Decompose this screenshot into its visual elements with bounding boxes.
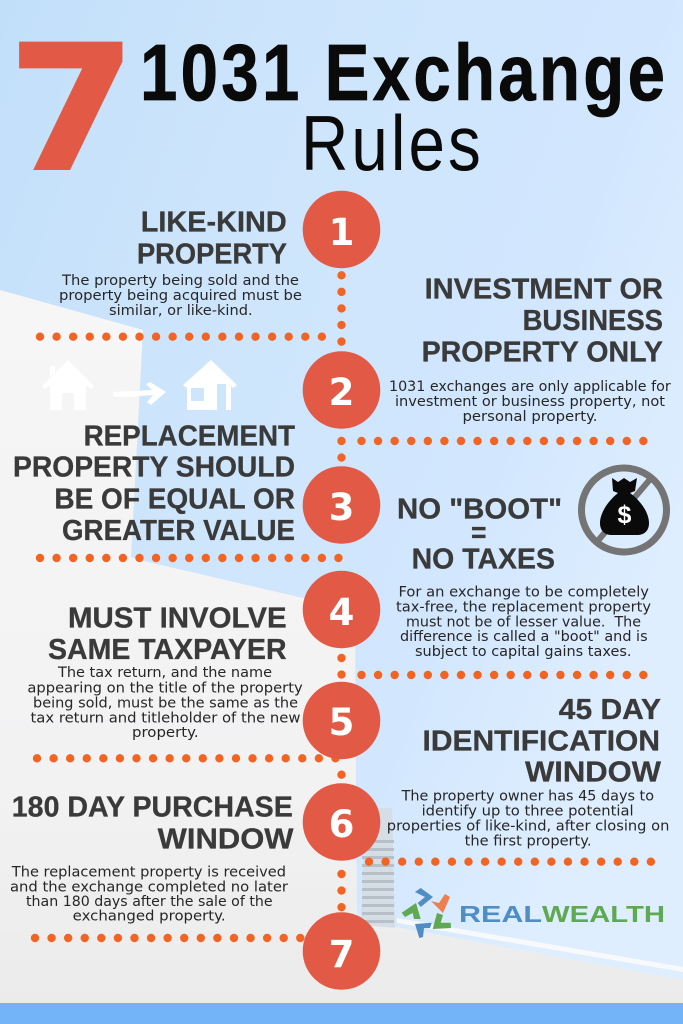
title [140,27,665,187]
rule 4 text: subject to capital gains taxes. [415,644,632,660]
rule 2 text: personal property. [462,409,598,425]
icon: no money bag [582,468,666,552]
step circle 6: 6 [329,803,354,846]
bottom bar [0,1003,683,1024]
dotted connectors [35,275,652,938]
rule 2 text: investment or business property, not [395,394,665,410]
rule 7 text: and the exchange completed no later [10,880,288,896]
rule 1 heading [137,207,287,270]
rule 6 text: The property owner has 45 days to [401,789,654,805]
rule 5 text: The tax return, and the name [57,665,272,681]
rule 5 heading [48,602,287,666]
step circle 2 [303,351,380,429]
rule 7 heading: 180 DAY PURCHASE [12,792,293,824]
rule 6 heading: IDENTIFICATION [422,726,660,758]
rule 3 heading [13,420,295,547]
rule 5 heading: MUST INVOLVE [68,602,287,634]
rule 5 text: being sold, must be the same as the [33,696,298,712]
rule 6 heading: 45 DAY [559,694,661,726]
rule 5 heading: SAME TAXPAYER [48,634,287,666]
logo: RealWealth: WEALTH [542,901,665,927]
background: white building [0,290,683,1004]
step circle 4 [303,571,380,648]
rule 4 heading: = [471,517,486,549]
logo: RealWealth: REAL [459,901,542,927]
rule 2 text: 1031 exchanges are only applicable for [389,379,671,395]
rule 3 heading: REPLACEMENT [84,420,295,452]
icon: arrow [113,382,166,405]
rule 1 text: property being acquired must be [59,288,302,304]
rule 6 text: identify up to three potential [422,804,634,820]
rule 4 heading [397,493,562,575]
rule 4 heading: NO "BOOT" [397,493,562,525]
rule 3 heading: PROPERTY SHOULD [13,452,295,484]
step circle 7: 7 [329,933,354,976]
rule 1 heading: PROPERTY [137,238,287,270]
step circle 4: 4 [329,591,354,634]
rule 6 heading [422,694,662,789]
rule 2 heading: PROPERTY ONLY [422,337,663,369]
rule 4 text [396,585,652,660]
rule 2 heading: INVESTMENT OR [425,273,663,305]
big number 7: 7 [8,8,135,209]
step circle 2: 2 [329,371,354,414]
step circle 1 [303,191,380,268]
rule 6 text: properties of like-kind, after closing on [387,819,669,835]
rule 3 heading: GREATER VALUE [62,515,295,547]
rule 6 heading: WINDOW [525,757,662,789]
rule 6 text [387,789,669,850]
icon: house to house [42,360,237,410]
rule 7 text: The replacement property is received [11,865,286,881]
rule 4 text: difference is called a "boot" and is [400,629,648,645]
rule 5 text [27,665,303,741]
step circle 6 [303,783,380,861]
rule 4 text: For an exchange to be completely [398,585,650,601]
rule 7 text [10,865,288,925]
step circle 7 [303,912,380,990]
rule 1 text [59,273,302,319]
step circle 1: 1 [329,211,354,254]
rule 7 text: exchanged property. [73,909,226,925]
rule 5 text: property. [132,725,199,741]
title: Rules [301,101,481,187]
logo: RealWealth [402,888,665,938]
icon: house left [42,360,94,410]
rule 1 text: The property being sold and the [61,273,299,289]
rule 2 heading [422,273,663,369]
rule 5 text: appearing on the title of the property [27,680,303,696]
step circle 5: 5 [329,701,354,744]
rule 6 text: the first property. [465,834,592,850]
step circle 3 [303,466,380,544]
rule 2 text [389,379,671,425]
title: 1031 Exchange [140,27,665,117]
rule 4 text: tax-free, the replacement property [396,600,652,616]
rule 7 heading [12,792,294,855]
rule 4 text: must not be of lesser value. The [406,615,641,631]
rule 3 heading: BE OF EQUAL OR [54,483,295,515]
rule 1 text: similar, or like-kind. [109,303,253,319]
icon: house right [183,360,237,410]
step circle 3: 3 [329,486,354,529]
rule 7 heading: WINDOW [158,823,294,855]
rule 5 text: tax return and titleholder of the new [30,710,301,726]
rule 7 text: than 180 days after the sale of the [26,894,273,910]
rule 2 heading: BUSINESS [523,305,663,337]
icon: no money bag: $ [618,501,632,529]
step circle 5 [303,682,380,759]
rule 4 heading: NO TAXES [412,543,555,575]
rule 1 heading: LIKE-KIND [141,207,287,239]
